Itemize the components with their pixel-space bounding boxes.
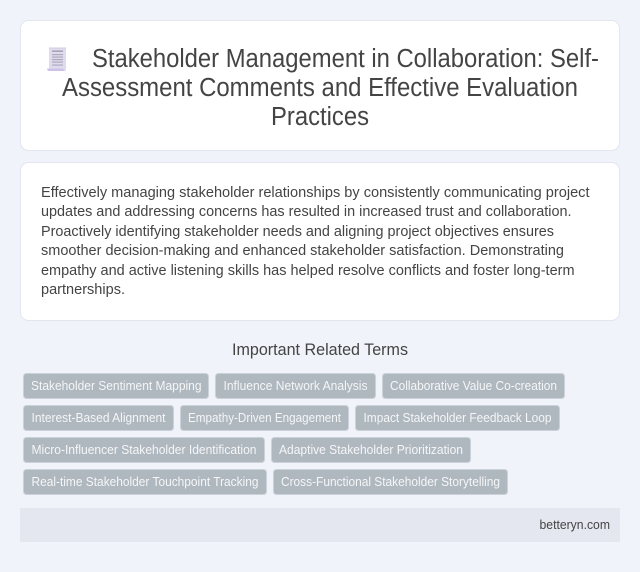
tag xyxy=(356,406,560,430)
footer source: betteryn.com xyxy=(540,518,610,532)
tag: Influence Network Analysis xyxy=(224,379,368,393)
tag xyxy=(180,406,348,430)
tag list xyxy=(24,374,564,494)
tag xyxy=(272,438,470,462)
title: Assessment Comments and Effective Evaluation xyxy=(62,74,578,102)
tag xyxy=(24,470,266,494)
tag xyxy=(24,374,208,398)
title: Practices xyxy=(271,103,369,131)
title xyxy=(62,45,599,131)
summary paragraph: updates and addressing concerns has resulted in increased trust and collaboration. xyxy=(41,203,572,220)
summary paragraph xyxy=(41,184,590,298)
tag xyxy=(274,470,508,494)
tag xyxy=(382,374,564,398)
footer bar xyxy=(20,508,620,542)
tag: Cross-Functional Stakeholder Storytelling xyxy=(281,475,500,489)
tag: Empathy-Driven Engagement xyxy=(188,411,341,425)
summary paragraph: Effectively managing stakeholder relationships by consistently communicating project xyxy=(41,184,590,201)
tag: Stakeholder Sentiment Mapping xyxy=(31,379,202,393)
tag xyxy=(24,438,264,462)
summary paragraph: partnerships. xyxy=(41,281,125,298)
tag xyxy=(24,406,174,430)
summary paragraph: smoother decision-making and enhanced stakeholder satisfaction. Demonstrating xyxy=(41,242,564,259)
tag: Real-time Stakeholder Touchpoint Tracking xyxy=(32,475,258,489)
summary paragraph: Proactively identifying stakeholder needs and aligning project objectives ensures xyxy=(41,223,554,240)
tag: Micro-Influencer Stakeholder Identification xyxy=(32,443,256,457)
tag: Impact Stakeholder Feedback Loop xyxy=(364,411,552,425)
panel: title card xyxy=(20,20,620,150)
tag: Adaptive Stakeholder Prioritization xyxy=(279,443,463,457)
title: Stakeholder Management in Collaboration: Self- xyxy=(92,45,599,73)
panel: summary text card xyxy=(20,162,620,320)
summary paragraph: empathy and active listening skills has helped resolve conflicts and foster long-term xyxy=(41,262,574,279)
icon: document scroll xyxy=(47,48,66,71)
tag: Interest-Based Alignment xyxy=(32,411,166,425)
tag: Collaborative Value Co-creation xyxy=(390,379,557,393)
heading: important related terms: Important Related Terms xyxy=(232,341,408,359)
tag xyxy=(216,374,376,398)
